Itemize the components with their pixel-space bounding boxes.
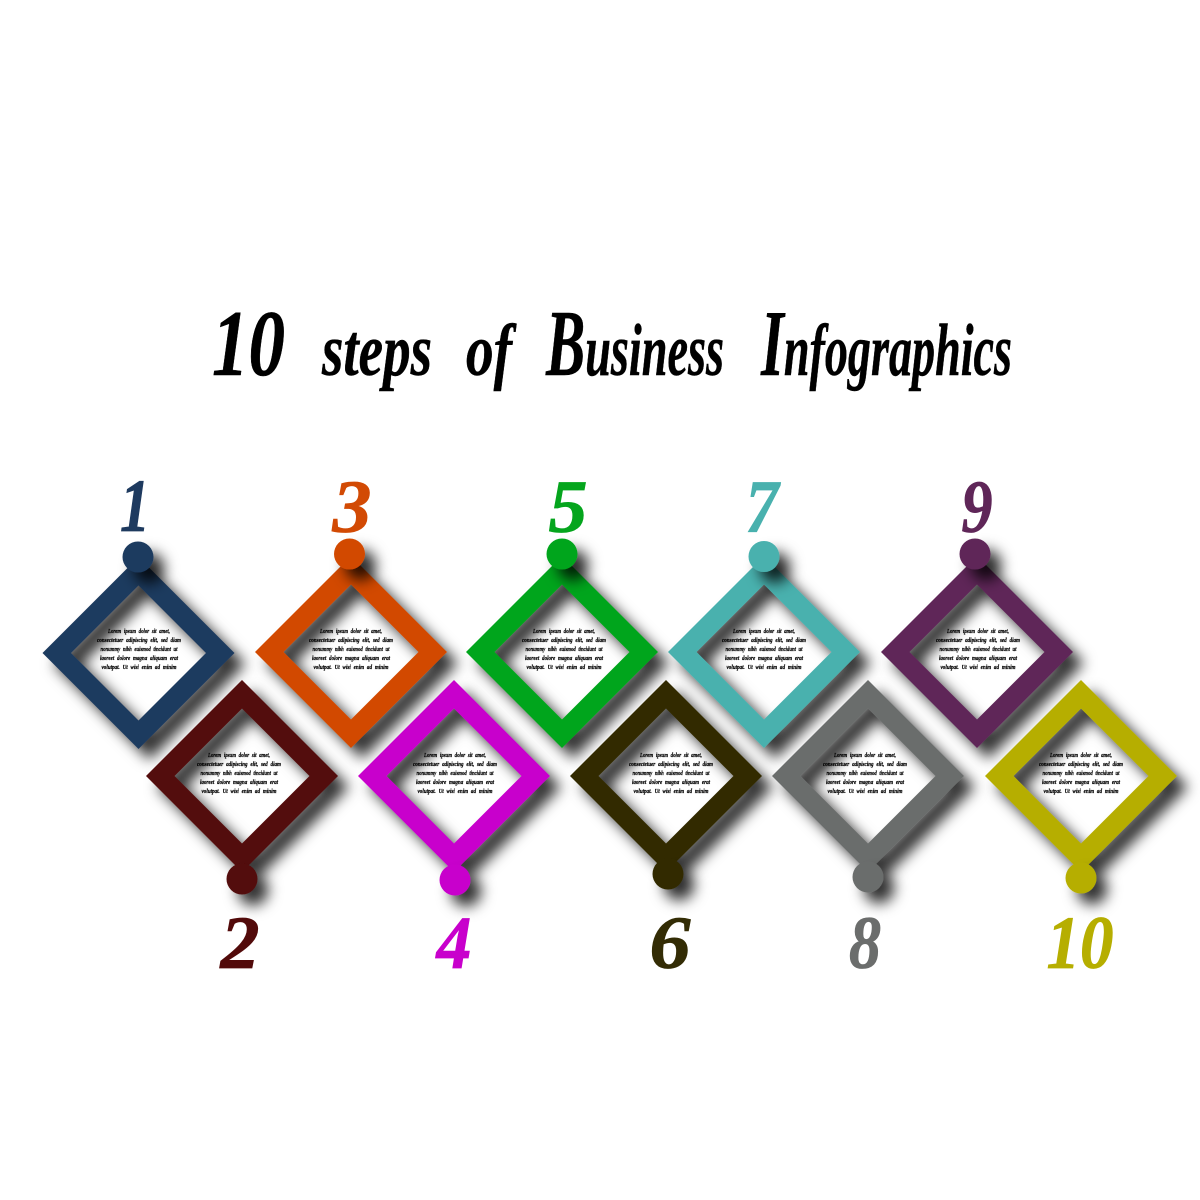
title — [212, 292, 1012, 396]
diamond frame 1 — [42, 557, 234, 749]
text block 1: volutpat. Ut wisi enim ad minim — [102, 664, 176, 671]
number 3: 3 — [331, 466, 372, 549]
step 7 — [668, 466, 860, 748]
text block 4: laoreet dolore magna aliquam erat — [416, 779, 494, 786]
text block 7: laoreet dolore magna aliquam erat — [725, 655, 803, 662]
step 3 — [255, 466, 447, 748]
text block 7: volutpat. Ut wisi enim ad minim — [726, 664, 802, 671]
text block 8: Lorem ipsum dolor sit amet, — [833, 752, 896, 759]
text block 7: nonummy nibh euismod tincidunt ut — [726, 646, 803, 653]
text block 10 — [1039, 752, 1123, 795]
text block 1: Lorem ipsum dolor sit amet, — [107, 628, 170, 635]
text block 4: consectetuer adipiscing elit, sed diam — [413, 761, 497, 768]
text block 5: volutpat. Ut wisi enim ad minim — [526, 664, 602, 671]
text block 6: laoreet dolore magna aliquam erat — [632, 779, 710, 786]
step 5 — [466, 466, 658, 748]
text block 8: nonummy nibh euismod tincidunt ut — [826, 770, 904, 777]
number 8: 8 — [849, 902, 881, 985]
text block 4: volutpat. Ut wisi enim ad minim — [418, 788, 492, 795]
text block 2: nonummy nibh euismod tincidunt ut — [200, 770, 278, 777]
text block 10: volutpat. Ut wisi enim ad minim — [1044, 788, 1118, 795]
text block 6: volutpat. Ut wisi enim ad minim — [634, 788, 708, 795]
text block 1 — [97, 628, 181, 671]
text block 3: nonummy nibh euismod tincidunt ut — [312, 646, 390, 653]
connector dot 5 — [546, 538, 578, 570]
step 6 — [570, 680, 762, 985]
connector dot 1 — [122, 542, 154, 572]
connector dot 7 — [748, 541, 780, 572]
text block 10: Lorem ipsum dolor sit amet, — [1049, 752, 1112, 759]
text block 2: volutpat. Ut wisi enim ad minim — [202, 788, 276, 795]
step 4 — [358, 680, 550, 985]
diamond frame 7 — [668, 556, 860, 748]
text block 6 — [629, 752, 713, 795]
title: Infographics — [760, 292, 1012, 396]
diamond frame 2 — [146, 680, 338, 872]
number 10: 10 — [1046, 902, 1114, 985]
number 6: 6 — [650, 902, 691, 985]
text block 9: volutpat. Ut wisi enim ad minim — [940, 664, 1016, 671]
text block 6: consectetuer adipiscing elit, sed diam — [629, 761, 713, 768]
text block 3: volutpat. Ut wisi enim ad minim — [314, 664, 388, 671]
text block 7 — [722, 628, 806, 671]
text block 8 — [823, 752, 907, 795]
diamond frame 9 — [881, 556, 1073, 748]
text block 3: laoreet dolore magna aliquam erat — [312, 655, 390, 662]
connector dot 4 — [440, 864, 470, 896]
number 2: 2 — [219, 902, 260, 985]
text block 6: Lorem ipsum dolor sit amet, — [639, 752, 702, 759]
number 5: 5 — [548, 466, 588, 549]
text block 2 — [197, 752, 281, 795]
title: steps — [321, 310, 432, 392]
text block 4: nonummy nibh euismod tincidunt ut — [416, 770, 494, 777]
text block 2: Lorem ipsum dolor sit amet, — [207, 752, 270, 759]
step 8 — [772, 680, 964, 985]
text block 3: Lorem ipsum dolor sit amet, — [319, 628, 382, 635]
step 10 — [985, 680, 1177, 985]
text block 6: nonummy nibh euismod tincidunt ut — [632, 770, 710, 777]
step 1 — [42, 465, 234, 749]
text block 1: consectetuer adipiscing elit, sed diam — [97, 637, 181, 644]
connector dot 2 — [226, 864, 258, 894]
text block 5 — [522, 628, 606, 671]
connector dot 6 — [652, 858, 684, 890]
connector dot 3 — [334, 538, 365, 570]
number 7: 7 — [746, 466, 781, 549]
text block 2: laoreet dolore magna aliquam erat — [200, 779, 278, 786]
text block 9 — [936, 628, 1020, 671]
connector dot 8 — [852, 862, 884, 892]
diamond frame 4 — [358, 680, 550, 872]
text block 5: consectetuer adipiscing elit, sed diam — [522, 637, 606, 644]
title: of — [466, 310, 517, 392]
text block 7: Lorem ipsum dolor sit amet, — [732, 628, 795, 635]
text block 7: consectetuer adipiscing elit, sed diam — [722, 637, 806, 644]
diamond frame 6 — [570, 680, 762, 872]
text block 1: nonummy nibh euismod tincidunt ut — [100, 646, 178, 653]
connector dot 9 — [960, 538, 990, 570]
text block 4 — [413, 752, 497, 795]
title: Business — [545, 292, 724, 396]
diamond frame 10 — [985, 680, 1177, 872]
text block 9: nonummy nibh euismod tincidunt ut — [940, 646, 1017, 653]
text block 9: laoreet dolore magna aliquam erat — [939, 655, 1017, 662]
number 1: 1 — [120, 465, 150, 548]
diamond frame 3 — [255, 556, 447, 748]
text block 8: volutpat. Ut wisi enim ad minim — [828, 788, 902, 795]
step 2 — [146, 680, 338, 985]
diamond frame 8 — [772, 680, 964, 872]
connector dot 10 — [1066, 862, 1096, 894]
title: 10 — [212, 292, 285, 396]
number 9: 9 — [962, 466, 992, 549]
step 9 — [881, 466, 1073, 748]
text block 9: Lorem ipsum dolor sit amet, — [946, 628, 1009, 635]
text block 5: Lorem ipsum dolor sit amet, — [532, 628, 595, 635]
text block 9: consectetuer adipiscing elit, sed diam — [936, 637, 1020, 644]
text block 10: nonummy nibh euismod tincidunt ut — [1042, 770, 1120, 777]
text block 10: consectetuer adipiscing elit, sed diam — [1039, 761, 1123, 768]
text block 3: consectetuer adipiscing elit, sed diam — [309, 637, 393, 644]
number 4: 4 — [435, 902, 472, 985]
text block 5: nonummy nibh euismod tincidunt ut — [526, 646, 603, 653]
text block 3 — [309, 628, 393, 671]
text block 1: laoreet dolore magna aliquam erat — [100, 655, 178, 662]
text block 10: laoreet dolore magna aliquam erat — [1042, 779, 1120, 786]
text block 5: laoreet dolore magna aliquam erat — [525, 655, 603, 662]
diamond frame 5 — [466, 556, 658, 748]
text block 4: Lorem ipsum dolor sit amet, — [423, 752, 486, 759]
text block 8: consectetuer adipiscing elit, sed diam — [823, 761, 907, 768]
text block 8: laoreet dolore magna aliquam erat — [826, 779, 904, 786]
text block 2: consectetuer adipiscing elit, sed diam — [197, 761, 281, 768]
